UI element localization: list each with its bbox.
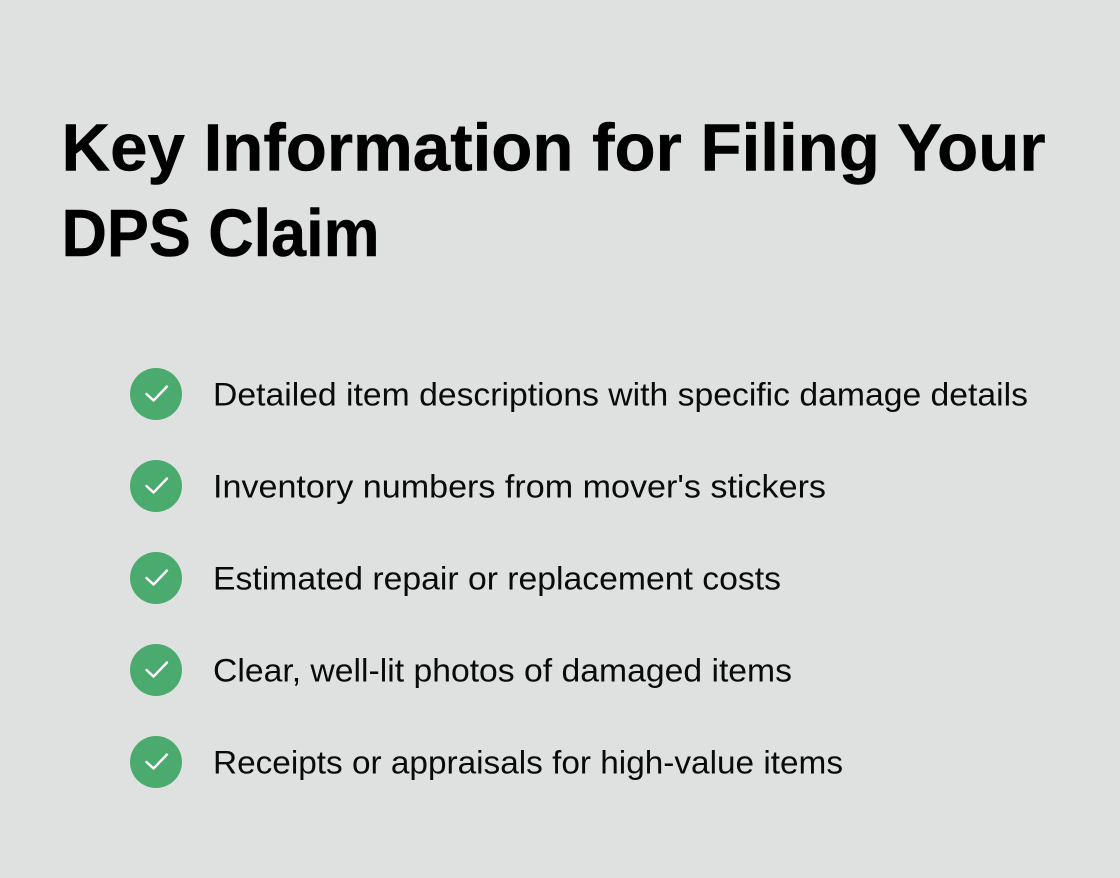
item: photos: Clear, well-lit photos of damaged items [213, 653, 792, 689]
item: item descriptions [130, 368, 1028, 420]
item: photos [130, 644, 792, 696]
item: receipts: Receipts or appraisals for high-value items [213, 745, 843, 781]
title: Key Information for Filing Your [62, 110, 1046, 186]
item: inventory numbers: Inventory numbers from mover's stickers [213, 469, 826, 505]
item: estimated costs [130, 552, 781, 604]
item: inventory numbers [130, 460, 826, 512]
checklist [130, 368, 1028, 788]
title [62, 110, 1046, 271]
item: receipts [130, 736, 843, 788]
item: item descriptions: Detailed item descriptions with specific damage details [213, 377, 1028, 413]
title: DPS Claim [62, 196, 380, 271]
item: estimated costs: Estimated repair or replacement costs [213, 561, 781, 597]
